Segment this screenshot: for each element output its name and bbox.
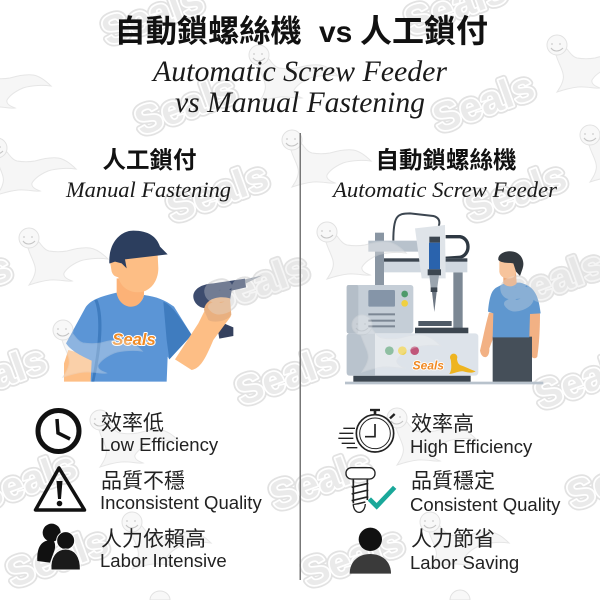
watermark: Seals pattern: Seals: [129, 67, 242, 144]
text: consistent quality: 品質穩定: [411, 470, 495, 493]
watermark: Seals pattern: Seals: [264, 442, 377, 519]
text: labor saving: 人力節省: [411, 528, 495, 551]
icon: clock: [38, 410, 79, 452]
watermark: Seals pattern: Seals: [427, 64, 540, 141]
icon: yellow seal logo: [449, 354, 476, 374]
watermark: Seals pattern: Seals: [201, 245, 314, 322]
text: labor intensive: [100, 528, 227, 571]
illustration: screw feeding machine with operator: [345, 213, 543, 384]
heading: automatic: [331, 147, 557, 202]
text: low efficiency: Low Efficiency: [100, 434, 219, 455]
subtitle: Automatic Screw Feeder: [151, 55, 447, 88]
center divider: [300, 133, 301, 580]
text: labor saving: [410, 528, 519, 573]
text: high efficiency: 效率高: [411, 413, 474, 436]
heading: automatic: 自動鎖螺絲機: [376, 147, 516, 173]
text: low efficiency: [100, 412, 219, 455]
logo: Seals on shirt: Seals: [112, 330, 156, 349]
text: high efficiency: [410, 413, 533, 457]
watermark: Seals pattern: Seals: [459, 154, 572, 231]
title: 人工鎖付: [360, 13, 488, 49]
watermark: Seals pattern: Seals: [296, 519, 409, 596]
text: labor intensive: Labor Intensive: [100, 550, 227, 571]
icon: warning triangle: [36, 468, 84, 510]
watermark: Seals pattern: Seals: [129, 67, 242, 144]
title: 自動鎖螺絲機: [114, 14, 302, 49]
text: inconsistent quality: Inconsistent Quality: [100, 492, 262, 513]
icon: screw with check: [346, 468, 395, 512]
heading: manual: [65, 147, 231, 202]
logo: Seals on machine: Seals: [413, 359, 444, 373]
watermark: Seals pattern: Seals: [230, 337, 343, 414]
title: vs: [319, 16, 352, 49]
watermark: Seals pattern: Seals: [427, 64, 540, 141]
watermark overlay on illustrations: [53, 222, 600, 377]
icon: people: [37, 524, 80, 570]
text: consistent quality: Consistent Quality: [410, 494, 561, 515]
text: labor intensive: 人力依賴高: [101, 528, 206, 551]
text: consistent quality: [410, 470, 561, 515]
heading: manual: Manual Fastening: [65, 177, 231, 202]
watermark: Seals pattern: Seals: [264, 442, 377, 519]
subtitle: vs Manual Fastening: [175, 86, 425, 119]
watermark overlay on illustrations: Seals: [201, 245, 314, 322]
heading: manual: 人工鎖付: [102, 147, 196, 173]
watermark: Seals pattern: Seals: [1, 519, 114, 596]
operator: [480, 251, 541, 382]
watermark: Seals pattern: Seals: [201, 245, 314, 322]
subtitle: [151, 55, 447, 119]
text: low efficiency: 效率低: [101, 412, 164, 435]
illustration: worker with drill: [64, 231, 262, 382]
text: inconsistent quality: [100, 470, 262, 513]
heading: automatic: Automatic Screw Feeder: [331, 177, 557, 202]
watermark: Seals pattern: Seals: [161, 154, 274, 231]
watermark: Seals pattern: Seals: [161, 154, 274, 231]
watermark: Seals pattern: Seals: [459, 154, 572, 231]
icon: stopwatch: [338, 410, 395, 452]
watermark: Seals pattern: Seals: [296, 519, 409, 596]
watermark: Seals pattern: Seals: [1, 519, 114, 596]
text: labor saving: Labor Saving: [410, 552, 519, 573]
watermark: Seals pattern: Seals: [230, 337, 343, 414]
text: high efficiency: High Efficiency: [410, 436, 533, 457]
text: inconsistent quality: 品質不穩: [101, 470, 185, 493]
icon: single person: [350, 528, 391, 574]
